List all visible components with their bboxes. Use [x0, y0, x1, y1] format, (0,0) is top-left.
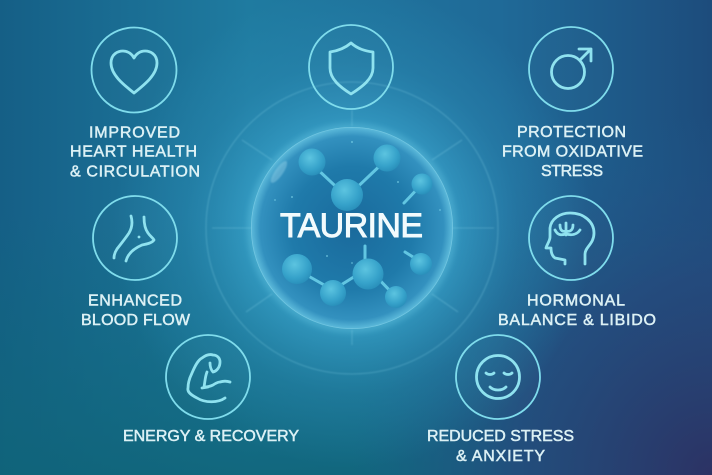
label: HEART HEALTH [70, 144, 197, 160]
central sphere [247, 123, 457, 333]
item: muscle energy [123, 335, 299, 445]
label: BLOOD FLOW [81, 312, 191, 329]
item: male symbol [502, 27, 643, 180]
label: ENHANCED [88, 293, 182, 310]
label [498, 293, 656, 329]
label: PROTECTION [517, 124, 626, 141]
item: heart health [70, 28, 200, 180]
molecule bonds [296, 159, 422, 297]
label [502, 124, 643, 180]
label: STRESS [541, 163, 603, 180]
orbit ring and radial rays [206, 82, 498, 374]
item: blood flow vessel [81, 196, 191, 329]
item: oxidative protection shield [309, 25, 393, 109]
sparkles [274, 141, 441, 264]
label: HORMONAL [527, 293, 625, 310]
label: BALANCE & LIBIDO [498, 312, 656, 329]
label [81, 293, 191, 329]
label: & CIRCULATION [70, 164, 200, 180]
item: calm face [427, 335, 574, 465]
label: REDUCED STRESS [427, 428, 574, 445]
item: brain hormones [498, 196, 656, 329]
label: ENERGY & RECOVERY [123, 428, 299, 445]
molecule atoms [282, 144, 432, 308]
label: & ANXIETY [456, 448, 545, 465]
label: FROM OXIDATIVE [502, 144, 643, 160]
label [427, 428, 574, 465]
label [70, 124, 200, 180]
label: IMPROVED [89, 124, 180, 142]
title: TAURINE: TAURINE [280, 207, 423, 245]
